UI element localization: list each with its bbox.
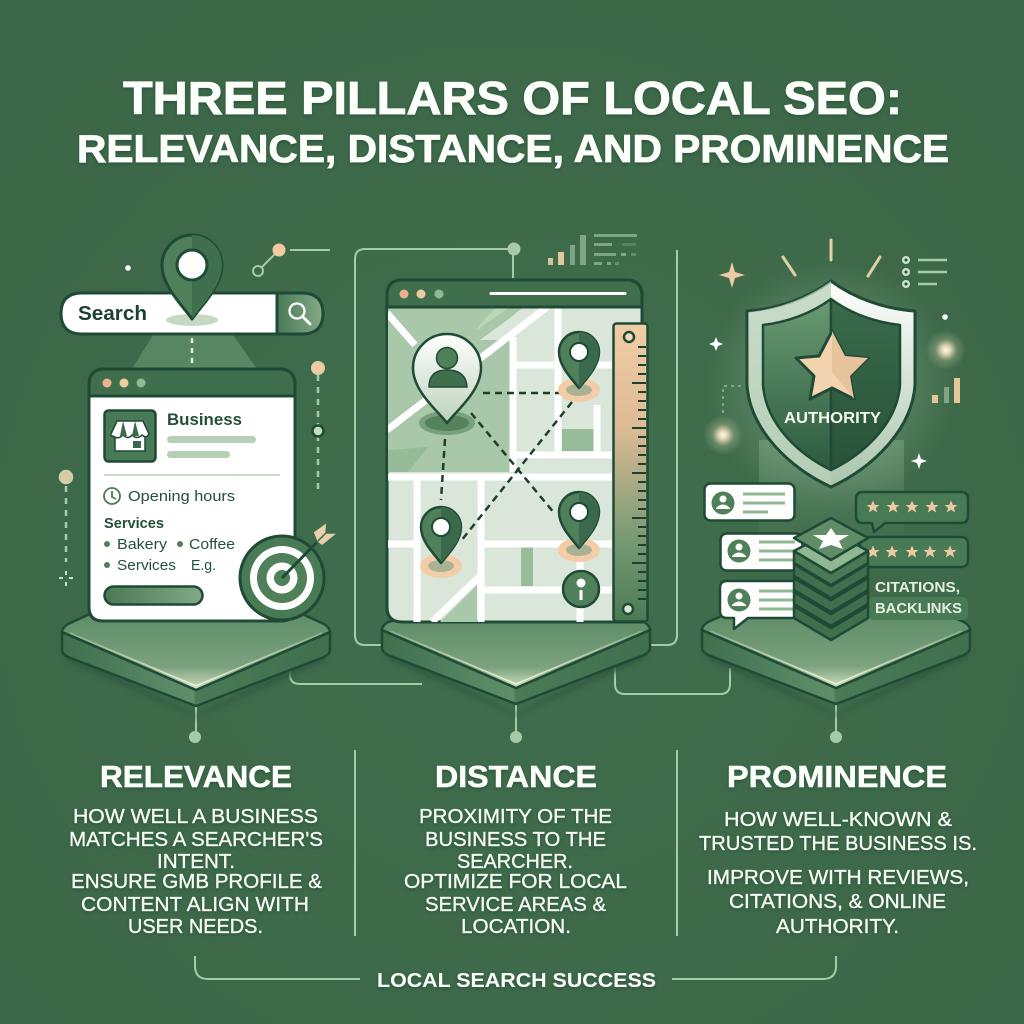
map pin: top right (558, 332, 600, 402)
browser window with map (387, 280, 642, 622)
business profile window: E.g. (191, 557, 216, 574)
icon: star (796, 331, 868, 399)
text: relevance description: CONTENT ALIGN WITH (81, 894, 309, 916)
shield (747, 281, 915, 487)
text: prominence description: IMPROVE WITH REVIEWS, (707, 867, 969, 889)
icon: storefront (104, 410, 156, 462)
decoration: mini chart (548, 234, 637, 265)
search bar (61, 293, 323, 334)
business profile window: Coffee (189, 536, 235, 553)
icon: target and arrow (240, 522, 338, 620)
shield: AUTHORITY (784, 410, 882, 427)
title (77, 72, 949, 171)
citations and backlinks label: BACKLINKS (875, 601, 962, 617)
panel: relevance illustration (59, 235, 338, 718)
text: prominence description: AUTHORITY. (776, 916, 899, 938)
platform (702, 614, 970, 716)
business profile window (89, 369, 295, 621)
ruler (614, 324, 648, 622)
icon: info marker (563, 571, 599, 607)
icon: location pin (162, 235, 222, 319)
text: relevance description: USER NEEDS. (128, 916, 263, 938)
text: relevance description (69, 806, 323, 938)
text: prominence description: HOW WELL-KNOWN & (724, 809, 953, 831)
star rating box 1 (856, 492, 968, 532)
business profile window: Bakery (117, 536, 168, 553)
dashed distance lines (441, 393, 572, 541)
platform (62, 613, 330, 718)
panel: distance illustration (382, 234, 650, 716)
title: THREE PILLARS OF LOCAL SEO: (123, 72, 902, 124)
text: prominence description: CITATIONS, & ONLINE (729, 891, 946, 913)
text: distance description: BUSINESS TO THE (425, 829, 606, 851)
map pin: bottom left (420, 507, 462, 578)
connector lines (195, 249, 836, 979)
text: distance description: OPTIMIZE FOR LOCAL (404, 871, 627, 893)
map (387, 307, 612, 622)
title: RELEVANCE, DISTANCE, AND PROMINENCE (77, 128, 949, 171)
text: distance description: PROXIMITY OF THE (419, 806, 612, 828)
text: prominence description: TRUSTED THE BUSINESS IS. (699, 833, 977, 855)
text: distance description: SERVICE AREAS & (425, 894, 607, 916)
review bubble 2 (720, 534, 802, 570)
citations and backlinks label (868, 580, 968, 620)
business profile window: Services (104, 516, 164, 532)
platform (382, 620, 650, 716)
icon: clock (104, 488, 120, 504)
business profile window: Opening hours (128, 488, 235, 505)
text: distance description (404, 806, 627, 938)
business profile window: Business (167, 411, 242, 429)
panel: prominence illustration (702, 240, 970, 716)
text: distance description: SEARCHER. (457, 851, 573, 873)
business profile window: Services (117, 557, 176, 574)
beam (132, 335, 257, 369)
decoration: sparkles and accents (703, 240, 966, 469)
heading: prominence: PROMINENCE (727, 759, 947, 794)
stacked citations (794, 518, 868, 640)
review bubble 3 (720, 581, 798, 629)
review bubble 1 (704, 484, 794, 520)
text: relevance description: ENSURE GMB PROFILE & (71, 871, 323, 893)
footer label: LOCAL SEARCH SUCCESS (377, 969, 656, 992)
text: prominence description (699, 809, 977, 938)
decoration: left panel accents (59, 244, 330, 586)
connector nodes (189, 242, 842, 743)
star rating box 2 (860, 537, 968, 567)
heading: distance: DISTANCE (435, 759, 597, 794)
map pin: bottom right (558, 492, 600, 562)
search bar: Search (78, 303, 147, 325)
citations and backlinks label: CITATIONS, (875, 580, 960, 596)
glow behind shield (706, 260, 956, 550)
text: relevance description: MATCHES A SEARCHER'S (69, 829, 323, 851)
heading: relevance: RELEVANCE (100, 759, 292, 794)
text: distance description: LOCATION. (461, 916, 571, 938)
text: relevance description: HOW WELL A BUSINESS (73, 806, 318, 828)
text: relevance description: INTENT. (157, 851, 235, 873)
user location pin (413, 334, 481, 435)
